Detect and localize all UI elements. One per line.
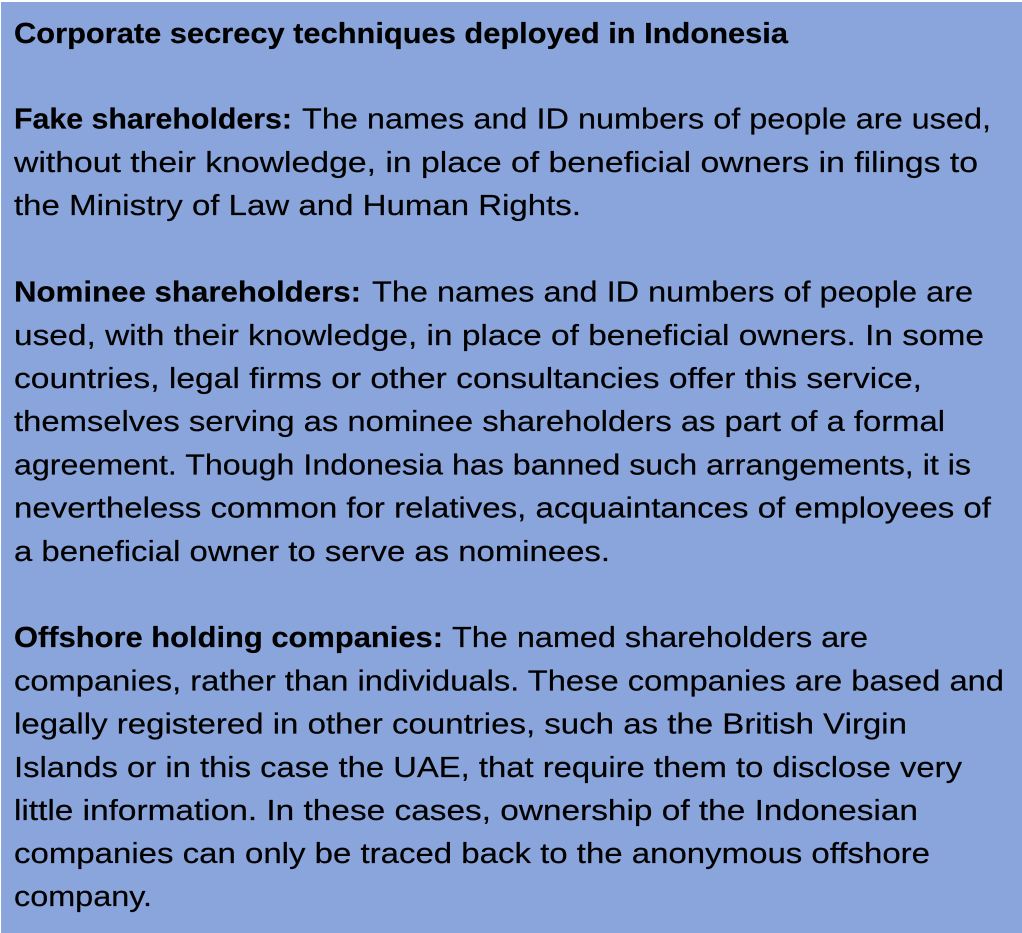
text block: offshore holding companies: legally registered in other countries, such as the British Virgin [14,708,907,740]
text block: offshore holding companies: little information. In these cases, ownership of the Indonesian [14,795,918,827]
text block: offshore holding companies: Offshore holding companies: [14,622,443,654]
text block: nominee shareholders: agreement. Though Indonesia has banned such arrangements, it is [14,450,971,482]
text block: nominee shareholders: Nominee shareholders: [14,276,361,308]
text block: offshore holding companies: companies can only be traced back to the anonymous offshore [14,838,930,870]
text block: fake shareholders [13,104,991,222]
text block: offshore holding companies: Islands or in this case the UAE, that require them to disclose very [14,752,963,784]
text block: fake shareholders: without their knowledge, in place of beneficial owners in filings to [13,147,978,179]
text block: offshore holding companies [14,622,1004,913]
text block: nominee shareholders: themselves serving as nominee shareholders as part of a formal [14,406,945,438]
title: Corporate secrecy techniques deployed in Indonesia [14,18,789,50]
text block: offshore holding companies: The named shareholders are [452,622,868,654]
text block: fake shareholders: The names and ID numbers of people are used, [302,104,991,136]
text block: fake shareholders: Fake shareholders: [14,104,292,136]
text block: offshore holding companies: companies, rather than individuals. These companies are based and [14,666,1004,698]
text block: nominee shareholders: used, with their knowledge, in place of beneficial owners. In some [14,320,984,352]
text block: offshore holding companies: company. [14,881,152,913]
text block: nominee shareholders [14,276,992,568]
text block: nominee shareholders: a beneficial owner to serve as nominees. [14,536,610,568]
text block: nominee shareholders: countries, legal firms or other consultancies offer this service, [14,363,922,395]
text block: nominee shareholders: The names and ID numbers of people are [372,276,973,308]
text block: fake shareholders: the Ministry of Law and Human Rights. [14,190,581,222]
text block: nominee shareholders: nevertheless common for relatives, acquaintances of employees of [14,492,992,524]
